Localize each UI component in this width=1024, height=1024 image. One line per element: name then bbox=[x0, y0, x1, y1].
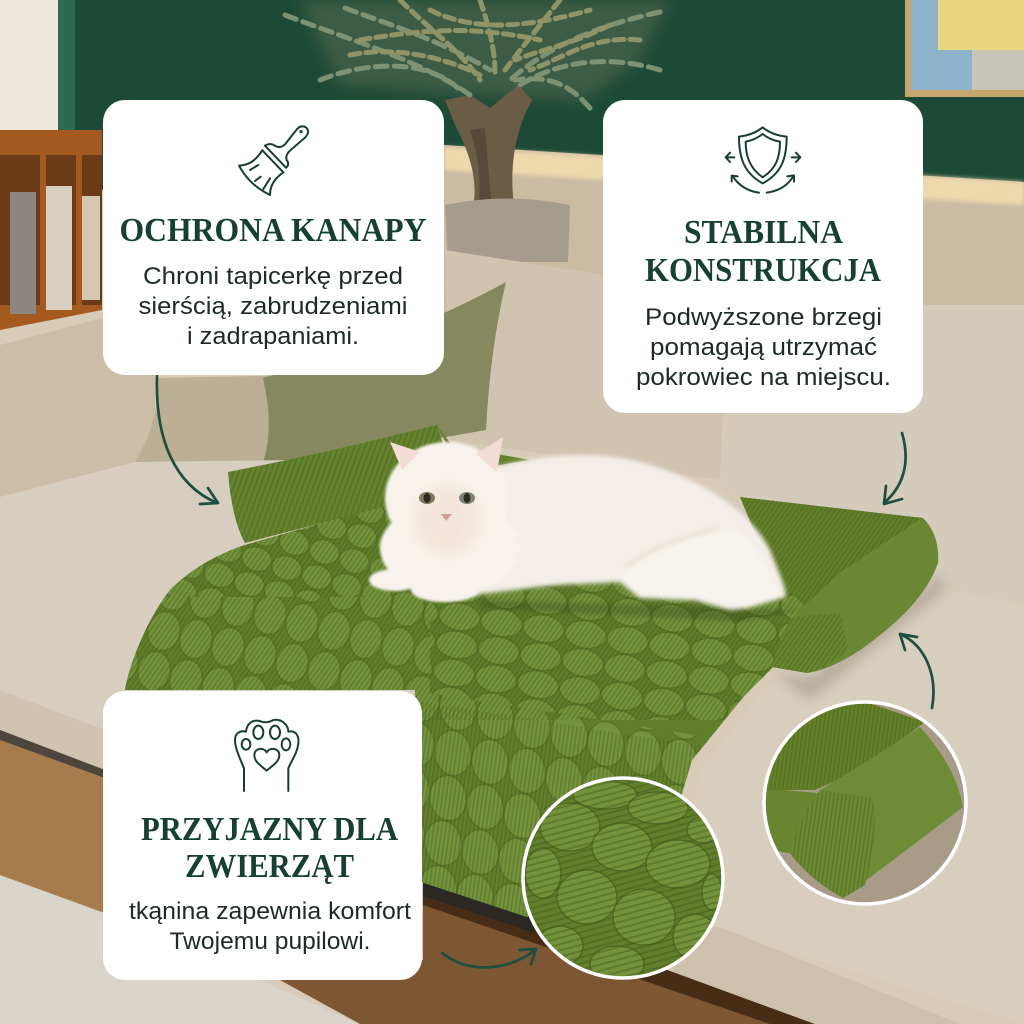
sofa back cushion right bbox=[722, 305, 1024, 603]
cat body and tail bbox=[430, 455, 786, 610]
sofa base bbox=[423, 880, 540, 933]
heading: PRZYJAZNY DLA bbox=[141, 811, 398, 848]
white cat bbox=[369, 437, 800, 622]
arrow: to right bolster bbox=[884, 433, 906, 504]
wood floor bbox=[0, 730, 360, 1024]
quilted rows: right bbox=[430, 582, 804, 720]
green sofa cover bbox=[110, 425, 938, 935]
cat eyes bbox=[419, 492, 435, 504]
icon: shield with arrows bbox=[726, 127, 800, 193]
text block bbox=[138, 263, 408, 350]
text block: pokrowiec na miejscu. bbox=[636, 364, 891, 391]
pillow green bbox=[262, 282, 506, 465]
heading bbox=[141, 811, 398, 885]
arrow: to front bolster bbox=[900, 634, 933, 708]
planter bbox=[445, 198, 570, 262]
left bolster bbox=[228, 425, 460, 543]
text block bbox=[129, 898, 411, 955]
curtain bbox=[0, 0, 58, 135]
shadow under cover bbox=[772, 575, 945, 700]
sofa front left bbox=[0, 690, 110, 772]
pillow beige bbox=[135, 375, 300, 462]
right bolster back bbox=[740, 497, 923, 612]
panel: Przyjazny dla zwierząt bbox=[103, 691, 422, 980]
heading bbox=[645, 214, 881, 289]
right bolster front bbox=[772, 518, 938, 673]
arrow: to left bolster bbox=[157, 376, 218, 504]
rug bbox=[0, 875, 360, 1024]
text block: Podwyższone brzegi bbox=[645, 304, 882, 331]
olive plant bbox=[285, 0, 670, 212]
wooden shelf bbox=[0, 130, 102, 330]
quilted rows: far bbox=[162, 508, 416, 600]
icon: paint brush bbox=[239, 126, 308, 195]
text block: i zadrapaniami. bbox=[187, 323, 359, 350]
text block: tkąnina zapewnia komfort bbox=[129, 898, 411, 925]
text block bbox=[636, 304, 891, 391]
green wall bbox=[0, 0, 1024, 190]
cat head and chest bbox=[369, 442, 520, 602]
inset: bolster close-up bbox=[760, 700, 970, 910]
back piece behind cat bbox=[437, 425, 530, 470]
heading: STABILNA bbox=[684, 214, 843, 251]
heading: ZWIERZĄT bbox=[185, 848, 354, 885]
sofa seat left bbox=[0, 440, 450, 730]
heading: KONSTRUKCJA bbox=[645, 252, 881, 289]
heading: OCHRONA KANAPY bbox=[120, 212, 426, 249]
floor shadow bbox=[423, 885, 815, 1024]
sofa seat right bbox=[670, 585, 1024, 1024]
sofa front right bbox=[673, 927, 960, 1024]
cat nose bbox=[441, 514, 452, 521]
quilted rows: near bbox=[416, 693, 710, 917]
arrow: to fabric inset bbox=[442, 949, 536, 967]
panel: Stabilna konstrukcja bbox=[603, 100, 923, 413]
cat ears bbox=[390, 442, 420, 470]
sofa left arm bbox=[0, 316, 155, 497]
panel: Ochrona kanapy bbox=[103, 100, 444, 375]
icon: paw bbox=[235, 720, 298, 791]
quilted rows: middle bbox=[125, 597, 430, 693]
text block: sierścią, zabrudzeniami bbox=[138, 293, 408, 320]
sofa back cushion centre bbox=[445, 250, 726, 480]
text block: Chroni tapicerkę przed bbox=[143, 263, 403, 290]
framed picture bbox=[905, 0, 1024, 97]
inset: quilted fabric bbox=[520, 775, 730, 985]
floor centre bbox=[280, 890, 815, 1024]
text block: Twojemu pupilowi. bbox=[170, 928, 370, 955]
lit wall niche bbox=[444, 145, 1024, 320]
text block: pomagają utrzymać bbox=[650, 334, 877, 361]
